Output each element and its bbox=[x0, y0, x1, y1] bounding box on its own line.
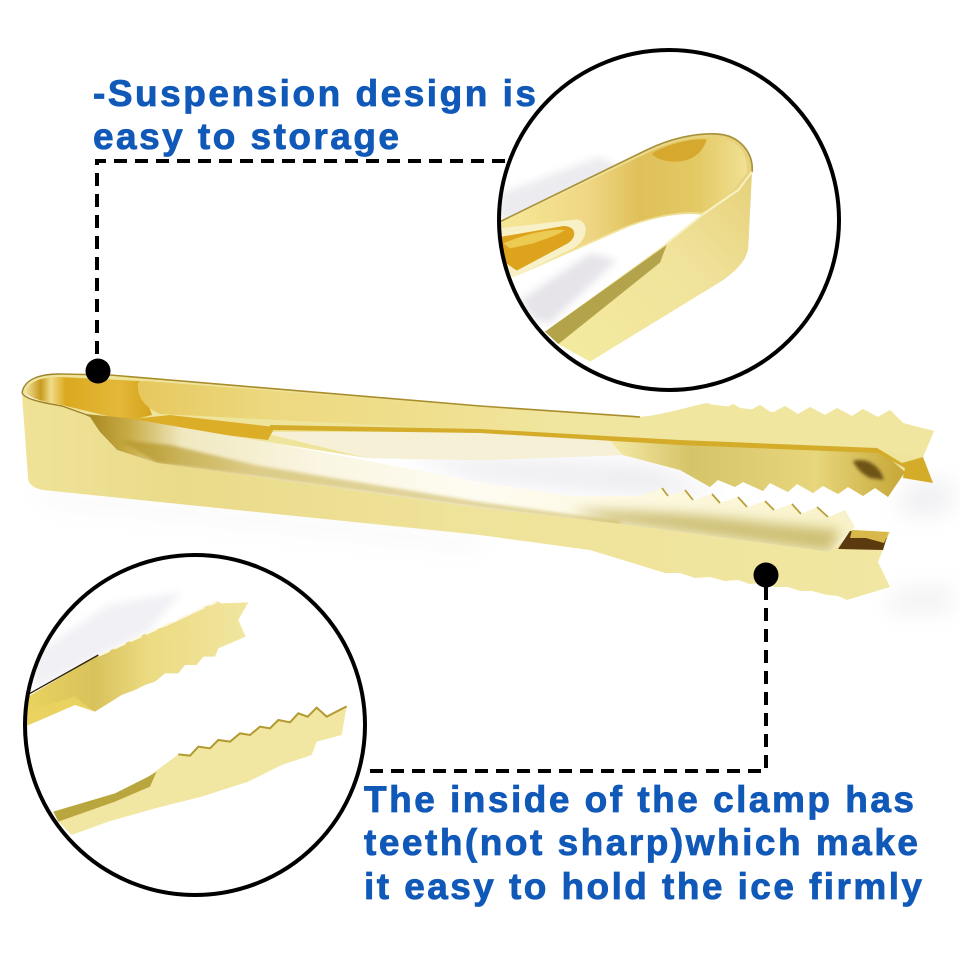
dark slot at tip bbox=[838, 531, 888, 550]
text: clamp teeth: teeth(not sharp)which make bbox=[364, 822, 918, 863]
callout: suspension detail circle bbox=[490, 40, 850, 400]
circle outline bbox=[499, 50, 839, 390]
tongs: back arm bbox=[22, 374, 934, 497]
gold strip along inner edge bbox=[270, 425, 933, 483]
back arm head underside bbox=[610, 441, 905, 497]
text: suspension design bbox=[93, 73, 536, 157]
lower shading edge on inner surface bbox=[120, 440, 620, 525]
leader line: suspension bbox=[86, 161, 505, 384]
leader line: teeth bbox=[370, 562, 778, 771]
serration marks bbox=[662, 488, 828, 517]
text: clamp teeth: The inside of the clamp has bbox=[364, 779, 914, 820]
orange mottled wedge bbox=[132, 415, 275, 440]
cup interior bbox=[26, 377, 152, 421]
anchor dot bbox=[754, 562, 778, 588]
circle outline bbox=[25, 555, 365, 895]
magnified hanging loop photo bbox=[501, 133, 754, 362]
lower jaw bbox=[53, 706, 347, 835]
dark reflection patch bbox=[853, 460, 884, 480]
tongs: front arm bbox=[22, 374, 890, 600]
left cup rim bbox=[22, 374, 90, 416]
front arm outer face bbox=[22, 395, 890, 600]
dashed leader bottom bbox=[370, 586, 766, 771]
upper jaw bbox=[25, 601, 248, 727]
main tongs photo bbox=[22, 374, 934, 600]
magnified teeth photo bbox=[27, 594, 348, 835]
rim line on back arm bbox=[60, 374, 640, 417]
text: suspension design: -Suspension design is bbox=[93, 73, 536, 114]
text: suspension design: easy to storage bbox=[93, 116, 399, 157]
slot gold rim bbox=[850, 530, 889, 543]
callout: teeth detail circle bbox=[15, 545, 375, 905]
head face bbox=[560, 403, 934, 457]
inner blade band bbox=[138, 381, 900, 455]
text: clamp teeth bbox=[364, 779, 922, 907]
front arm inner surface bbox=[85, 414, 855, 552]
text: clamp teeth: it easy to hold the ice firmly bbox=[364, 866, 922, 907]
soft shadows around tongs bbox=[40, 455, 950, 612]
anchor dot bbox=[86, 358, 110, 384]
dashed leader top bbox=[97, 161, 505, 360]
inner surface shading at head bbox=[570, 510, 840, 552]
back arm outer silhouette with serrated head bbox=[22, 374, 934, 497]
cream underside of back arm bbox=[260, 432, 623, 460]
